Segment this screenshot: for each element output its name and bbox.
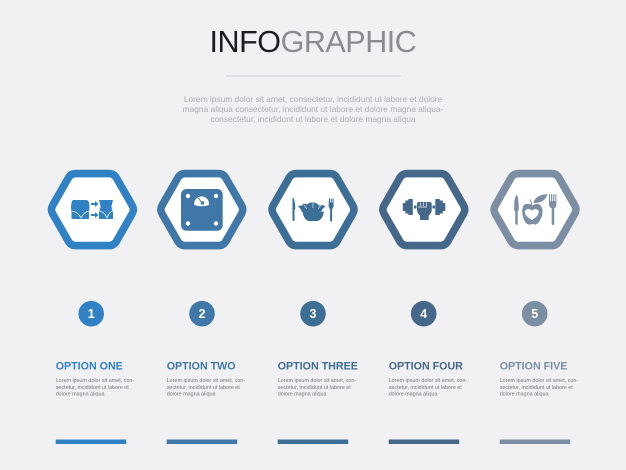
bar 5: [500, 440, 570, 444]
option text 2: sectetur, incididunt ut labore et: [167, 385, 240, 391]
option text 4: Lorem ipsum dolor sit amet, con-: [389, 378, 467, 384]
hexagon frame 2: [161, 174, 243, 246]
hexagon frame 5: [494, 174, 576, 246]
option text 3: Lorem ipsum dolor sit amet, con-: [278, 378, 356, 384]
panel: option three: [272, 174, 358, 444]
option text 4: dolore magna aliqua: [389, 391, 438, 397]
option text 5: Lorem ipsum dolor sit amet, con-: [500, 378, 578, 384]
intro paragraph: [183, 94, 444, 124]
intro paragraph: consectetur, incididunt ut labore et dolore magna aliqua: [210, 114, 416, 124]
option title 1: OPTION ONE: [56, 360, 123, 372]
number badge 1: [78, 301, 104, 327]
option text 4: sectetur, incididunt ut labore et: [389, 385, 462, 391]
option text 4: [389, 378, 467, 397]
icon: dumbbell in fist: [403, 199, 445, 220]
number badge 1: 1: [88, 307, 95, 321]
option text 3: [278, 378, 356, 397]
number badge 2: 2: [199, 307, 206, 321]
option text 3: sectetur, incididunt ut labore et: [278, 385, 351, 391]
option text 5: sectetur, incididunt ut labore et: [500, 385, 573, 391]
option text 2: [167, 378, 245, 397]
bar 4: [389, 440, 459, 444]
option text 3: dolore magna aliqua: [278, 391, 327, 397]
option text 2: dolore magna aliqua: [167, 391, 216, 397]
option text 5: dolore magna aliqua: [500, 391, 549, 397]
option text 1: sectetur, incididunt ut labore et: [56, 385, 129, 391]
hexagon frame 1: [51, 174, 133, 246]
intro paragraph: Lorem ipsum dolor sit amet, consectetur, incididunt ut labore et dolore: [184, 94, 443, 104]
option text 1: dolore magna aliqua: [56, 391, 105, 397]
bar 3: [278, 440, 348, 444]
icon: apple with knife and fork: [514, 194, 556, 225]
option text 2: Lorem ipsum dolor sit amet, con-: [167, 378, 245, 384]
option text 1: Lorem ipsum dolor sit amet, con-: [56, 378, 134, 384]
number badge 3: 3: [310, 307, 317, 321]
hexagon frame 4: [383, 174, 465, 246]
icon: waist slimming: [71, 200, 113, 219]
option title 2: OPTION TWO: [167, 360, 236, 372]
icon: salad bowl with knife and fork: [292, 198, 334, 222]
number badge 5: 5: [531, 307, 538, 321]
hexagon frame 3: [272, 174, 354, 246]
number badge 4: 4: [420, 307, 427, 321]
number badge 4: [411, 301, 437, 327]
number badge 3: [300, 301, 326, 327]
option title 5: OPTION FIVE: [500, 360, 567, 372]
number badge 2: [189, 301, 215, 327]
intro paragraph: magna aliqua consectetur, incididunt ut labore et dolore magna aliqua-: [183, 104, 444, 114]
bar 1: [56, 440, 126, 444]
option title 4: OPTION FOUR: [389, 360, 463, 372]
panel: option five: [494, 174, 578, 444]
panel: option two: [161, 174, 245, 444]
option text 5: [500, 378, 578, 397]
option title 3: OPTION THREE: [278, 360, 358, 372]
option text 1: [56, 378, 134, 397]
number badge 5: [522, 301, 548, 327]
panel: option one: [51, 174, 134, 444]
icon: weighing scale: [181, 189, 223, 231]
title: INFOGRAPHIC: [210, 25, 416, 59]
panel: option four: [383, 174, 467, 444]
bar 2: [167, 440, 237, 444]
